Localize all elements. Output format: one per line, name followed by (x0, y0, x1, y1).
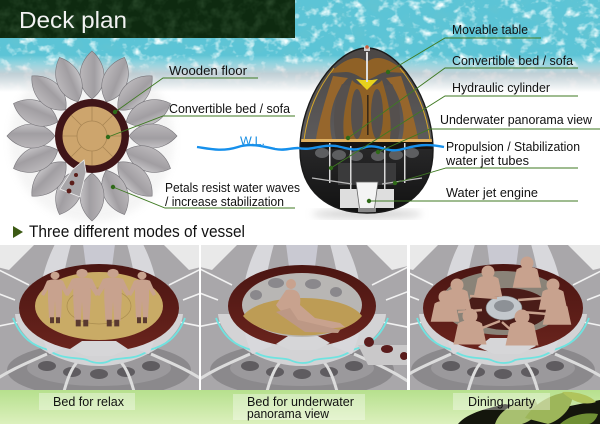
water line (197, 136, 444, 150)
callout: water jet engine: Water jet engine (446, 185, 538, 200)
callout: wooden floor (113, 63, 258, 114)
lower windows (315, 148, 419, 161)
callout: water jet engine (367, 185, 578, 203)
title bar (0, 0, 295, 38)
callout: water jet tubes: Propulsion / Stabilization (446, 139, 580, 154)
deck plan flower (7, 51, 177, 222)
four reclining figures (41, 269, 156, 326)
callout: hydraulic cylinder (329, 80, 578, 170)
callout: petals: Petals resist water waves (165, 180, 300, 195)
callout: movable table: Movable table (452, 22, 528, 37)
upper gold dome (316, 52, 418, 139)
label: bed for relax (39, 393, 135, 410)
callout: water jet tubes (393, 139, 580, 185)
label: bed for underwater panorama view: panorama view (247, 406, 330, 421)
callout: convertible bed: Convertible bed / sofa (169, 101, 291, 116)
label: bed for relax: Bed for relax (53, 394, 124, 409)
bottom green band (0, 390, 600, 424)
callout: convertible bed section: Convertible bed / sofa (452, 53, 574, 68)
water texture background (0, 0, 600, 92)
water line: W.L. (240, 136, 265, 148)
icon: beacon (364, 45, 370, 51)
dining figures (431, 256, 571, 346)
callout: underwater view (376, 112, 600, 154)
section heading: Three different modes of vessel (29, 223, 245, 241)
ring and floor (228, 265, 376, 350)
callout: petals (111, 180, 300, 209)
reclining figures (276, 279, 345, 333)
callout: hydraulic cylinder: Hydraulic cylinder (452, 80, 551, 95)
service module (358, 337, 408, 365)
callout: convertible bed (106, 101, 295, 139)
label: dining party (453, 393, 550, 410)
egg vessel section (298, 45, 436, 219)
callout: petals: / increase stabilization (165, 194, 284, 209)
title bar: Deck plan (19, 7, 127, 33)
engine (340, 182, 394, 214)
label: dining party: Dining party (468, 394, 535, 409)
callout: water jet tubes: water jet tubes (445, 153, 529, 168)
plant (458, 392, 600, 424)
table dish (486, 296, 522, 320)
panel: bed for panorama view (201, 245, 407, 390)
callout: wooden floor: Wooden floor (169, 63, 248, 78)
label: bed for underwater panorama view: Bed for underwater (247, 394, 355, 409)
label: bed for underwater panorama view (233, 394, 365, 421)
icon: module on petals (60, 160, 86, 197)
callout: convertible bed section (346, 53, 578, 140)
callout: movable table (386, 22, 541, 74)
ring and floor (19, 264, 179, 356)
panel: bed for relax (0, 245, 199, 390)
callout: underwater view: Underwater panorama view (440, 112, 593, 127)
panel: dining party (410, 245, 600, 390)
ring and floor (423, 264, 583, 354)
